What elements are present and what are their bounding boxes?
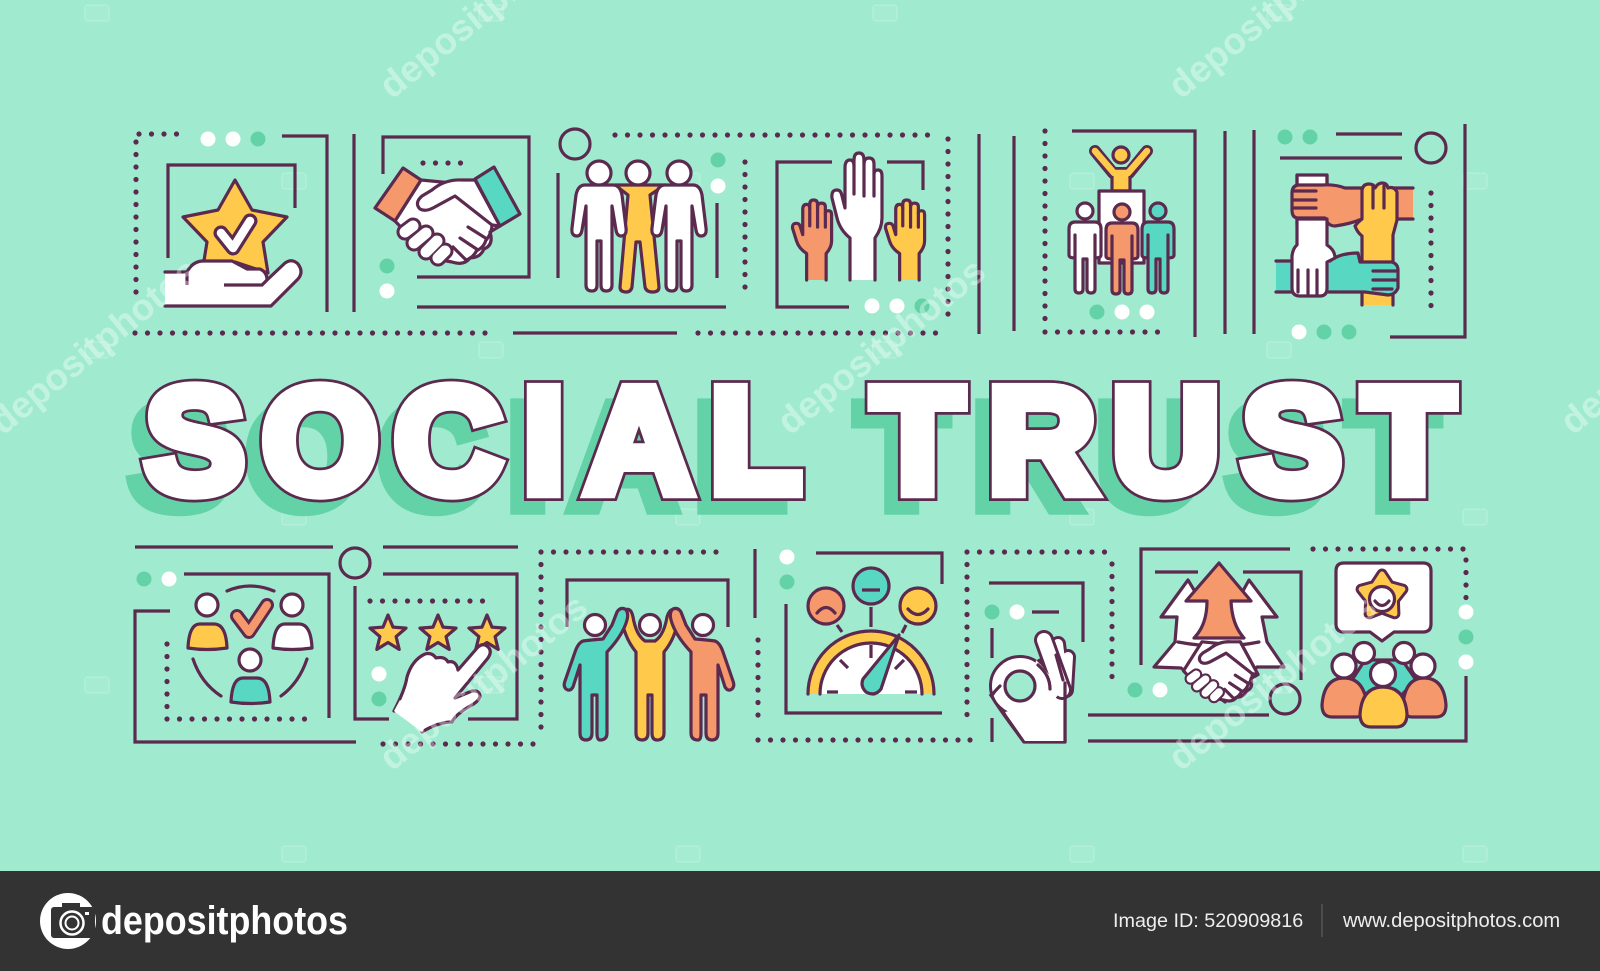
panel: bottom row frames and dots (135, 547, 1474, 744)
title: SOCIAL TRUST: SOCIAL TRUST (145, 357, 1454, 524)
icon: OK hand gesture (990, 640, 1068, 742)
icon: four interlocked hands (1276, 175, 1413, 305)
icon: group consensus with checkmark (188, 586, 312, 704)
footer bar (0, 871, 1600, 971)
icon: star in open hand (165, 180, 301, 306)
image id: Image ID: 520909816 (1113, 910, 1303, 932)
icon: raised hands (792, 153, 925, 280)
logo: camera badge (40, 893, 96, 949)
panel: top row frames and dots (135, 124, 1465, 340)
icon: people with star rating speech bubble (1322, 563, 1446, 727)
site url: www.depositphotos.com (1342, 910, 1560, 932)
icon: handshake with cuffs (375, 167, 520, 263)
icon: mood gauge with three faces (808, 568, 936, 694)
watermark camera marks (85, 5, 1487, 862)
watermark: depositphotos: depositphotos (371, 586, 595, 778)
icon: three people high five (564, 608, 734, 740)
icon: three arrows up with handshake (1154, 563, 1284, 702)
icon: leader on podium with people (1069, 147, 1174, 294)
icon: three people standing together (572, 161, 706, 292)
icon: three star rating with pointing hand (370, 615, 505, 732)
watermark: depositphotos: depositphotos (769, 250, 993, 442)
logo wordmark: depositphotos (101, 899, 348, 943)
watermark: depositphotos: depositphotos (1160, 586, 1384, 778)
